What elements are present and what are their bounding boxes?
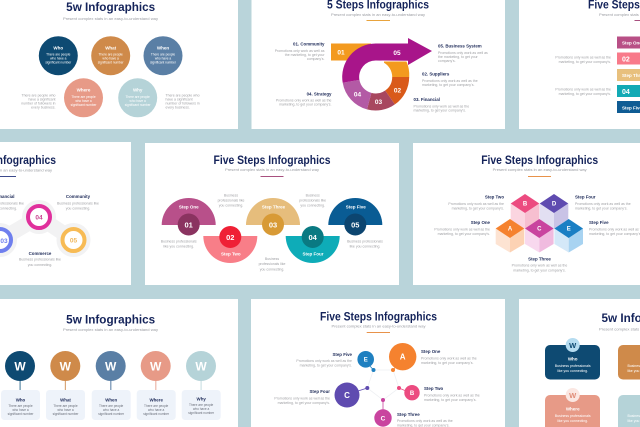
- text block: left note: number of followers in: [21, 102, 56, 106]
- label: community: 01. Community: [293, 42, 325, 46]
- label: step one: Promotions only work as well as the: [434, 228, 490, 232]
- text block: step two: marketing, to get your company's.: [559, 60, 611, 64]
- card: where: Business professionals: [555, 414, 591, 418]
- node C bottom: C: [381, 416, 386, 422]
- cube C: C: [537, 226, 542, 232]
- card: where: like you connecting.: [557, 419, 588, 423]
- label: step one: marketing, to get your company's.: [421, 361, 473, 365]
- circle: what: [91, 36, 130, 75]
- pin: who: who have a: [12, 408, 29, 412]
- pin: what: There are people: [53, 404, 78, 408]
- subtitle: Present complex stats in an easy-to-understand way: [493, 168, 587, 172]
- label: step two: marketing, to get your company's.: [424, 398, 476, 402]
- circle: what: significant number: [98, 60, 125, 64]
- bar: step five: [617, 101, 640, 113]
- label: step three: marketing, to get your company's.: [513, 268, 566, 272]
- text: below step three: professionals like: [259, 262, 285, 266]
- label: financial: marketing, to get your company's.: [414, 108, 466, 112]
- cube A: [496, 219, 524, 252]
- label: financial: [414, 97, 469, 112]
- ring 03: [0, 229, 11, 251]
- step two bowl: [203, 226, 257, 263]
- label: step four: marketing, to get your company's.: [575, 206, 627, 210]
- text block: right note: have a significant: [166, 98, 193, 102]
- label: step four: Step Four: [575, 195, 596, 200]
- step one dome: 01: [185, 220, 193, 230]
- step two bowl: 02: [226, 233, 234, 242]
- segment 04: [343, 80, 371, 109]
- panel: 5w circles: [0, 0, 238, 129]
- circle: who: There are people: [46, 52, 71, 56]
- label: suppliers: marketing, to get your company's.: [422, 83, 474, 87]
- circle: where: significant number: [71, 103, 97, 107]
- label: step four: Promotions only work as well as the: [575, 202, 631, 206]
- cube D: [540, 194, 568, 229]
- title: 5w Infographics: [66, 314, 155, 326]
- text: below step three: Business: [265, 257, 279, 261]
- label: financial: Promotions only work as well as the: [414, 104, 469, 108]
- text block: left note: every business.: [31, 106, 56, 110]
- panel: five steps orbit: [251, 299, 505, 427]
- arrow donut chart: 03: [375, 99, 382, 106]
- arrow donut chart: 04: [354, 92, 361, 98]
- circle: where: There are people: [71, 95, 96, 99]
- panel: 5w pins: [0, 299, 238, 427]
- label: step one: [421, 349, 477, 365]
- pin: when: W: [105, 360, 117, 374]
- label: step two: marketing, to get your company's.: [452, 206, 504, 210]
- text: below step five: Business professionals: [347, 240, 383, 244]
- pin: when: When: [105, 398, 117, 402]
- pin: who: [1, 351, 40, 420]
- pin: where: significant number: [143, 412, 170, 416]
- label: step five: Step Five: [589, 220, 609, 225]
- circle: when: who have a: [155, 56, 171, 60]
- ring 04: [28, 206, 50, 228]
- circle: why: There are people: [126, 95, 150, 99]
- text block: left note: There are people who: [21, 94, 56, 98]
- panel: five steps rings: [0, 142, 131, 285]
- circle: who: [39, 36, 78, 75]
- label: step one: [434, 220, 491, 236]
- pin: why: [182, 351, 221, 420]
- text: above step two: Business: [224, 194, 238, 198]
- text: above step two: [218, 194, 244, 208]
- text: above step two: professionals like: [218, 198, 244, 202]
- cube E: [554, 219, 583, 252]
- label: business system: [438, 44, 488, 63]
- pin: when: There are people: [99, 404, 124, 408]
- text: above step two: you connecting.: [219, 204, 243, 208]
- pin: why: significant number: [188, 411, 215, 415]
- arrow donut chart: 01: [337, 50, 345, 56]
- pin: where: There are people: [144, 404, 169, 408]
- text: below step one: [161, 240, 197, 248]
- label: financial: [0, 194, 24, 210]
- text block: right note: number of followers in: [166, 102, 200, 106]
- panel: five steps bars: [519, 0, 640, 129]
- circle: why: who have a: [130, 99, 146, 103]
- text block: step four: [555, 88, 611, 96]
- circle: who: Who: [53, 46, 63, 50]
- step three dome: 03: [269, 220, 277, 230]
- bar: 02: 02: [622, 56, 630, 64]
- text block: left note: have a significant: [28, 98, 56, 102]
- label: step four: [274, 389, 330, 405]
- cube C: [525, 219, 554, 252]
- pin: what: W: [60, 360, 72, 374]
- label: strategy: Promotions only work as well as the: [276, 98, 332, 102]
- cube E: E: [567, 226, 571, 232]
- label: step two: Promotions only work as well as the: [424, 394, 480, 398]
- cube B: B: [523, 202, 528, 208]
- ring chain halo: [0, 200, 90, 257]
- label: step five: marketing, to get your company's.: [300, 364, 352, 368]
- pin: why: W: [195, 360, 207, 374]
- pin: why: There are people: [189, 403, 214, 407]
- card: where: Where: [566, 406, 580, 412]
- pin: where: W: [150, 360, 162, 374]
- label: business system: company's.: [438, 59, 456, 63]
- arrow donut chart: 02: [394, 88, 401, 94]
- label: suppliers: [422, 72, 478, 87]
- label: step four: Step Four: [310, 389, 330, 394]
- text block: right note: every business.: [166, 106, 190, 110]
- label: financial: 03. Financial: [414, 97, 440, 102]
- subtitle: Present complex stats in an easy-to-understand way: [63, 17, 158, 21]
- title: 5w Infographics: [66, 1, 155, 14]
- label: community: you connecting.: [66, 206, 90, 210]
- label: step two: Step Two: [485, 195, 504, 200]
- step five dome: 05: [351, 220, 359, 230]
- pin: what: [46, 351, 85, 420]
- label: strategy: marketing, to get your company's.: [279, 102, 332, 106]
- arrow donut chart: 05: [393, 50, 401, 57]
- text: below step three: you connecting.: [260, 268, 284, 272]
- label: community: [275, 42, 325, 61]
- node C left: [334, 382, 369, 408]
- label: step four: [575, 195, 631, 210]
- pin: when: who have a: [103, 408, 120, 412]
- label: business system: the marketing, to get your: [438, 55, 479, 59]
- label: step two: Step Two: [424, 386, 444, 391]
- label: step three: Step Three: [528, 256, 551, 262]
- step four bowl: [286, 226, 340, 263]
- label: step three: Step Three: [397, 412, 420, 417]
- card: why: [618, 395, 640, 427]
- node C left: C: [344, 391, 350, 400]
- node E: [357, 351, 376, 372]
- card: who: like you connecting.: [557, 369, 588, 373]
- bar: step three: [617, 69, 640, 81]
- text: above step four: [299, 194, 326, 208]
- bar: 04: 04: [622, 89, 630, 96]
- label: step four: marketing, to get your company's.: [278, 401, 330, 405]
- circle: where: Where: [77, 88, 91, 93]
- title: Five Steps Infographics: [481, 154, 598, 167]
- pin: why: Why: [197, 396, 206, 402]
- cube A: A: [508, 226, 513, 232]
- pin: where: who have a: [148, 408, 165, 412]
- step four bowl: Step Four: [302, 252, 324, 256]
- text: below step one: like you connecting.: [163, 244, 194, 248]
- pin: when: [92, 351, 131, 420]
- text block: step four: Promotions only work as well as the: [555, 88, 611, 92]
- panel: 5w cards: [519, 299, 640, 427]
- label: step one: marketing, to get your company's.: [438, 232, 490, 236]
- text: below step one: Business professionals: [161, 240, 197, 244]
- pin: when: significant number: [98, 412, 125, 416]
- label: step five: [589, 220, 640, 236]
- step three dome: Step Three: [262, 204, 286, 210]
- label: community: [57, 194, 99, 210]
- label: commerce: Commerce: [29, 251, 52, 256]
- label: commerce: Business professionals like: [19, 258, 61, 262]
- card: who: [545, 338, 600, 380]
- label: step two: [448, 195, 504, 210]
- pin: who: Who: [16, 398, 26, 402]
- subtitle: Present complex stats in an easy-to-understand way: [331, 13, 425, 17]
- segment 02: [385, 77, 409, 104]
- label: business system: Promotions only work as well as: [438, 51, 488, 55]
- step three dome: [246, 198, 300, 236]
- circle: when: significant number: [150, 60, 177, 64]
- step five dome: [328, 198, 382, 236]
- text: below step five: like you connecting.: [350, 244, 380, 248]
- panel: five steps cubes: [413, 143, 640, 285]
- segment 01: [331, 44, 371, 60]
- subtitle: Present complex stats in an easy-to-understand way: [63, 328, 158, 332]
- text block: step two: Promotions only work as well as the: [555, 56, 611, 60]
- label: commerce: [19, 251, 61, 267]
- label: step five: marketing, to get your company's.: [589, 232, 640, 236]
- arrow donut chart: [331, 38, 432, 111]
- cube B: [511, 194, 539, 229]
- node C bottom: [374, 398, 392, 427]
- label: step two: [424, 386, 480, 402]
- circle: why: significant number: [125, 103, 152, 107]
- text: below step five: [347, 240, 383, 248]
- circle: what: There are people: [99, 52, 123, 56]
- node A: [389, 343, 416, 372]
- circle: when: When: [157, 46, 169, 50]
- ring 05: [62, 229, 84, 251]
- panel: five steps half circles: [145, 143, 399, 285]
- label: suppliers: Promotions only work as well as the: [422, 79, 478, 83]
- card: what: [618, 345, 640, 380]
- label: step one: Step One: [471, 220, 491, 225]
- circle: where: [64, 78, 103, 117]
- label: step five: Step Five: [332, 352, 353, 357]
- card: who: Who: [568, 356, 578, 362]
- card: where: [545, 388, 600, 427]
- node B: [397, 385, 420, 400]
- circle: when: [144, 36, 182, 75]
- circle: why: [118, 78, 157, 117]
- title: Five Steps Infographics: [320, 310, 437, 324]
- label: commerce: you connecting.: [28, 263, 52, 267]
- node A: A: [400, 352, 406, 362]
- label: community: Community: [66, 194, 91, 199]
- card: where: W: [569, 391, 577, 400]
- step one dome: [162, 198, 216, 236]
- label: strategy: 04. Strategy: [307, 92, 332, 96]
- step four bowl: 04: [309, 233, 318, 242]
- segment 03: [367, 90, 395, 111]
- label: community: Promotions only work as well as: [275, 49, 325, 53]
- label: business system: 05. Business System: [438, 44, 482, 48]
- segment 05 arrow: [342, 38, 432, 83]
- pin: who: significant number: [8, 412, 34, 416]
- label: strategy: [276, 92, 332, 106]
- text block: left note: [21, 94, 56, 110]
- label: step five: Promotions only work as well as the: [296, 359, 352, 363]
- ring 04: 04: [35, 214, 43, 222]
- circle: who: significant number: [45, 60, 72, 64]
- label: step five: [296, 352, 353, 368]
- card: who: W: [569, 341, 577, 350]
- text: above step four: professionals like: [299, 198, 326, 202]
- ring 03: 03: [0, 238, 8, 245]
- cube D: D: [552, 202, 557, 208]
- pin: what: who have a: [57, 408, 74, 412]
- pin: what: What: [60, 398, 71, 402]
- label: step one: Step One: [421, 349, 441, 354]
- title: Five Steps Infographics: [214, 154, 330, 167]
- text block: right note: [166, 94, 200, 110]
- pin: who: There are people: [8, 404, 33, 408]
- label: community: company's.: [307, 57, 325, 61]
- step one dome: Step One: [179, 204, 199, 210]
- label: step three: Promotions only work as well as the: [397, 419, 453, 423]
- orbit hexagon: [367, 370, 399, 400]
- text block: right note: There are people who: [166, 94, 200, 98]
- label: step one: Promotions only work as well as the: [421, 356, 477, 360]
- circle: what: who have a: [103, 56, 119, 60]
- subtitle: Present complex stats in an easy-to-understand way: [225, 168, 319, 172]
- label: step three: [397, 412, 453, 427]
- text: above step four: you connecting.: [300, 204, 325, 208]
- text block: step two: [555, 56, 611, 64]
- ring 05: 05: [70, 238, 77, 244]
- label: step three: [512, 256, 567, 272]
- label: step four: Promotions only work as well as the: [274, 396, 330, 400]
- circle: who: who have a: [50, 56, 67, 60]
- node B: B: [410, 391, 415, 397]
- circle: what: What: [105, 46, 117, 50]
- pin: what: significant number: [53, 412, 79, 416]
- label: step three: Promotions only work as well as the: [512, 264, 567, 268]
- pin: where: Where: [149, 398, 163, 402]
- text block: step four: marketing, to get your company's.: [559, 92, 611, 96]
- step five dome: Step Five: [346, 204, 366, 210]
- bar: step one: [617, 36, 640, 48]
- pin: why: who have a: [193, 407, 210, 411]
- label: community: the marketing, to get your: [285, 53, 325, 57]
- label: step two: Promotions only work as well as the: [448, 202, 504, 206]
- pin: where: [137, 351, 176, 420]
- circle: when: There are people: [151, 52, 175, 56]
- bar: 02: [617, 52, 640, 64]
- step two bowl: Step Two: [221, 252, 241, 256]
- text: above step four: Business: [306, 194, 320, 198]
- label: community: Business professionals like: [57, 202, 99, 206]
- node E: E: [364, 358, 368, 364]
- text: below step three: [259, 257, 285, 272]
- panel: 5 steps arrow: [252, 0, 505, 129]
- card: who: Business professionals: [555, 364, 591, 368]
- label: suppliers: 02. Suppliers: [422, 72, 450, 76]
- pin: who: W: [14, 360, 26, 374]
- bar: 04: [617, 85, 640, 97]
- circle: where: who have a: [75, 99, 92, 103]
- circle: why: Why: [133, 88, 143, 93]
- subtitle: Present complex stats in an easy-to-understand way: [332, 324, 426, 328]
